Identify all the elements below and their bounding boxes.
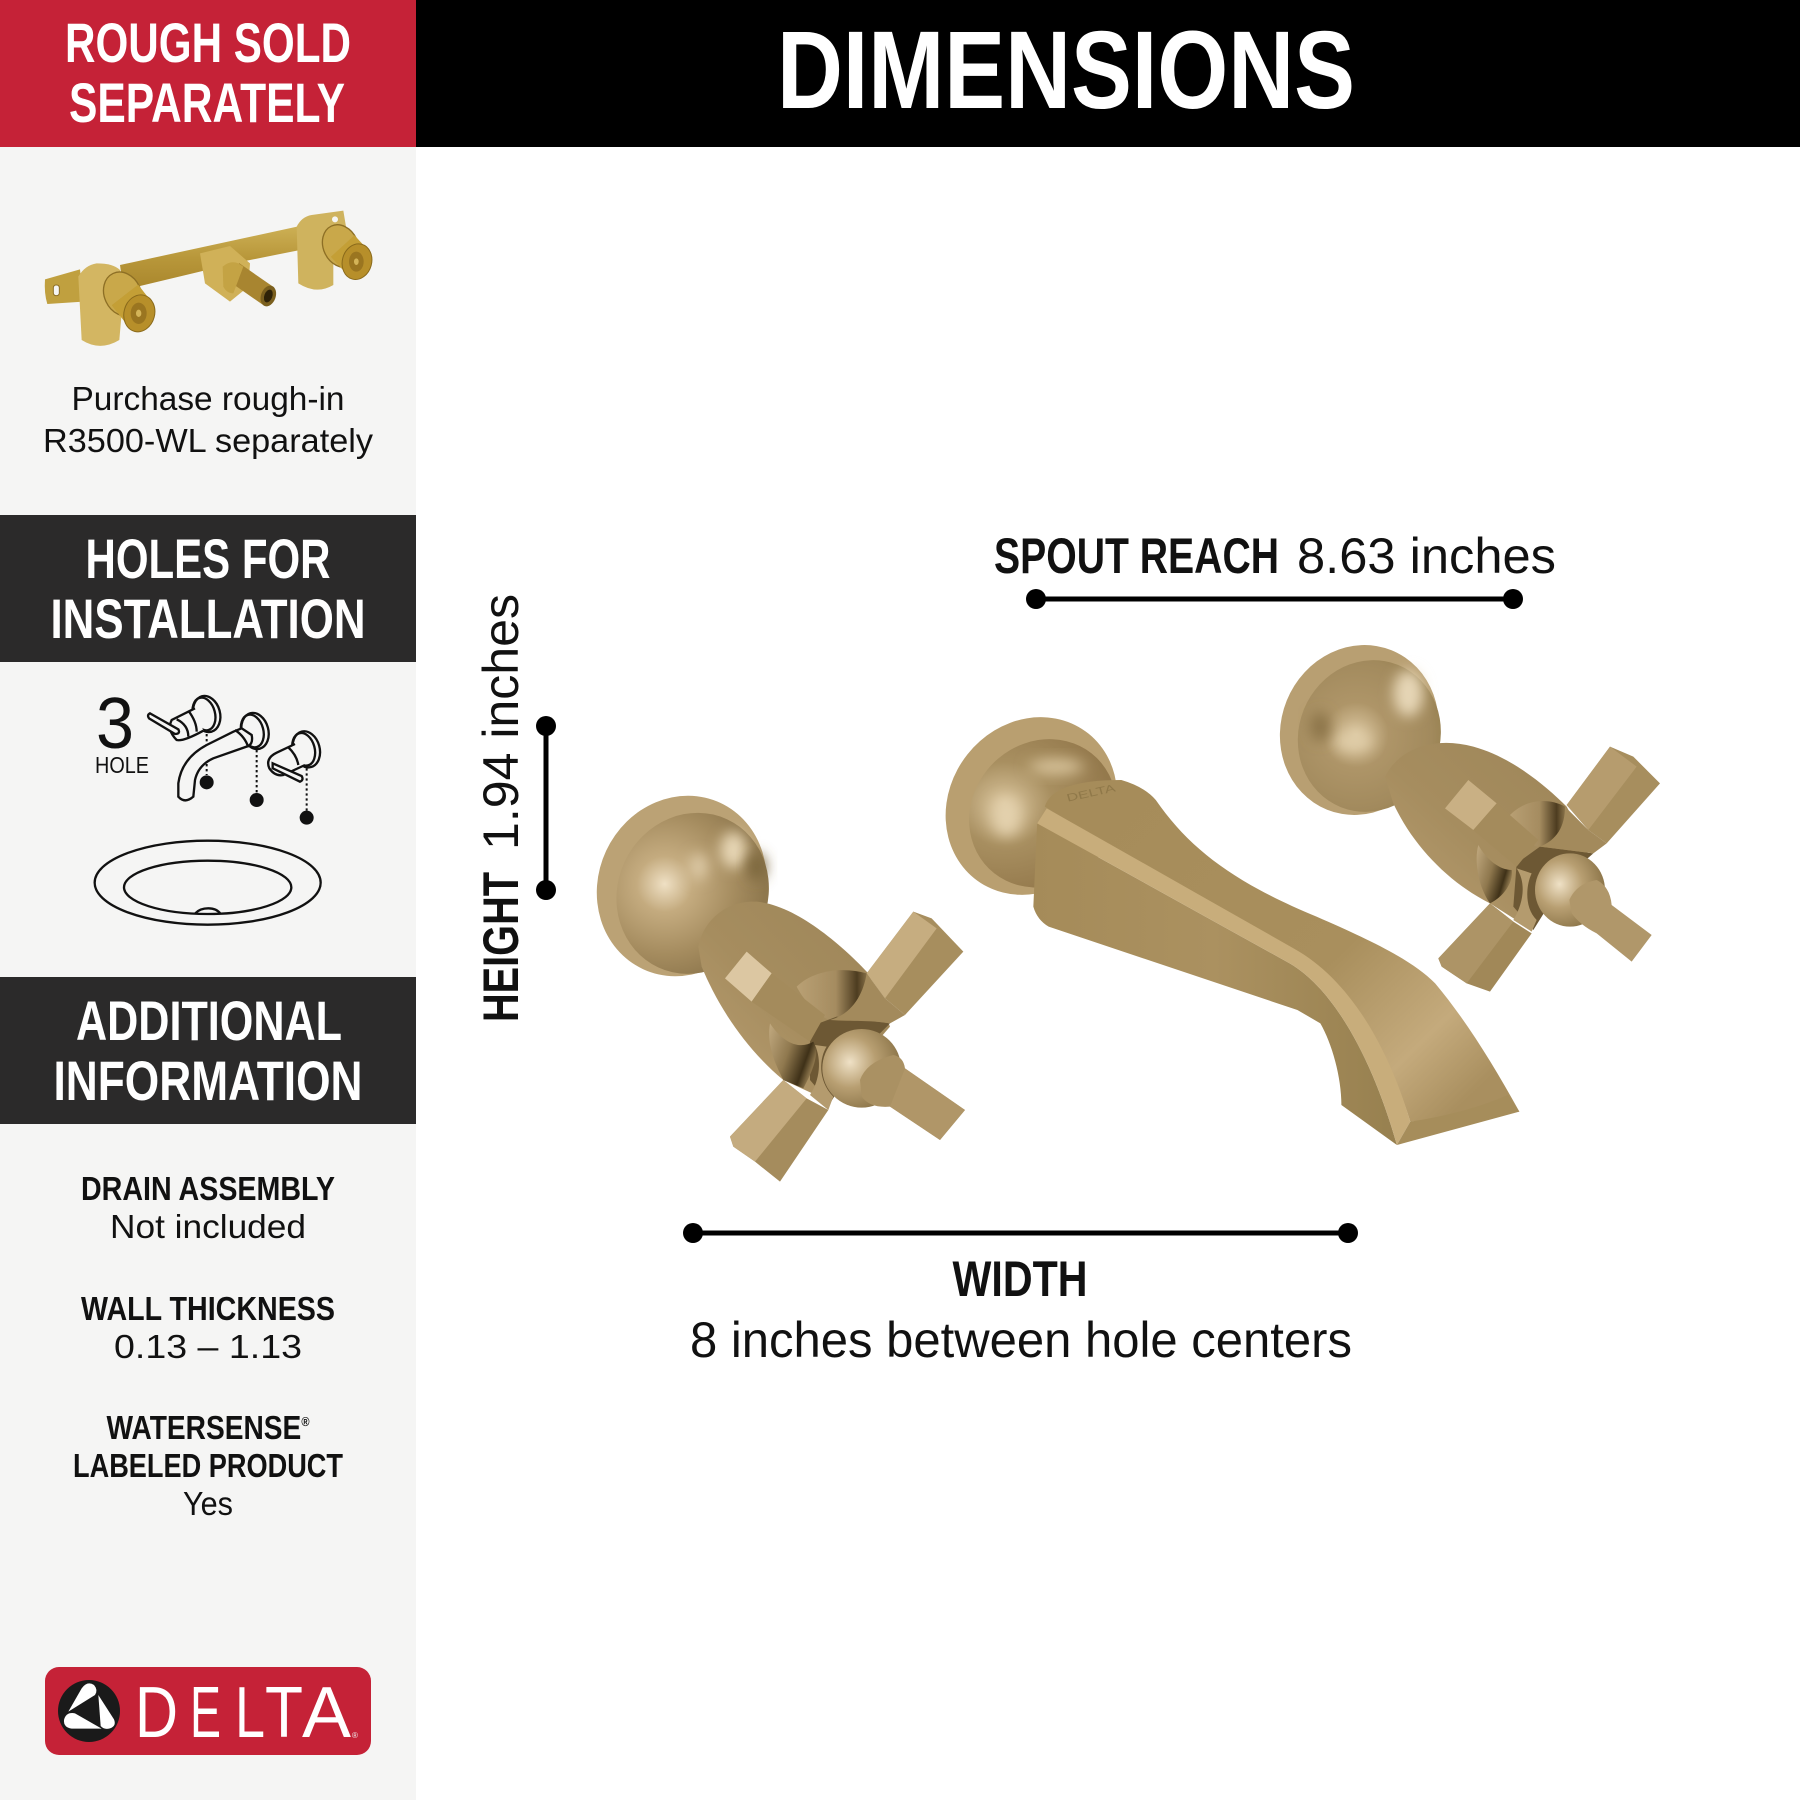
dimension: spout reach: SPOUT REACH (994, 528, 1279, 584)
header: holes for installation: HOLES FOR (86, 527, 330, 590)
image: center wall spout (922, 699, 1519, 1145)
header: additional information: ADDITIONAL (76, 989, 342, 1052)
image: left cross handle (567, 768, 965, 1182)
panel: left sidebar (0, 0, 416, 1800)
header: rough sold separately: SEPARATELY (69, 71, 345, 134)
text: purchase rough-in note (43, 380, 374, 459)
text: drain assembly (81, 1170, 335, 1245)
dimension: height: 1.94 inches (473, 594, 529, 850)
text: drain assembly: DRAIN ASSEMBLY (81, 1170, 335, 1207)
image: brass rough-in valve (45, 211, 376, 346)
header: holes for installation (0, 515, 416, 662)
header: additional information (0, 977, 416, 1124)
dimension: width: WIDTH (952, 1251, 1088, 1307)
logo: delta: L (235, 1673, 265, 1753)
text: wall thickness: WALL THICKNESS (81, 1290, 335, 1327)
dimension: width (683, 1223, 1358, 1368)
icon: three hole faucet and basin: 3 (96, 684, 134, 764)
text: purchase rough-in note: R3500-WL separately (43, 422, 374, 459)
title: dimensions banner: DIMENSIONS (777, 9, 1355, 132)
logo: delta: A (302, 1673, 351, 1753)
text: purchase rough-in note: Purchase rough-in (72, 380, 344, 417)
text: wall thickness (81, 1290, 335, 1365)
dimension: height (473, 594, 556, 1022)
header: rough sold separately: ROUGH SOLD (65, 11, 351, 74)
text: watersense labeled product: ® (301, 1414, 310, 1429)
text: watersense labeled product: WATERSENSE (106, 1409, 335, 1446)
icon: three hole faucet and basin: HOLE (95, 752, 149, 778)
logo: delta: ® (352, 1731, 358, 1740)
header: additional information: INFORMATION (54, 1049, 362, 1112)
icon: three hole faucet and basin (95, 684, 324, 925)
text: watersense labeled product (73, 1409, 343, 1522)
dimension: spout reach (994, 528, 1556, 609)
logo: delta: D (135, 1673, 178, 1753)
text: drain assembly: Not included (110, 1208, 306, 1245)
header: rough sold separately (0, 0, 416, 147)
logo: delta: T (265, 1673, 303, 1753)
title: dimensions banner (416, 0, 1800, 147)
dimension: spout reach: 8.63 inches (1297, 528, 1556, 584)
text: wall thickness: 0.13 – 1.13 (114, 1328, 302, 1365)
dimension: height: HEIGHT (473, 872, 529, 1022)
logo: delta: E (190, 1673, 221, 1753)
text: watersense labeled product: LABELED PRODUCT (73, 1447, 343, 1484)
image: center wall spout: DELTA (1065, 783, 1117, 804)
dimension: width: 8 inches between hole centers (690, 1312, 1352, 1368)
image: right cross handle (1254, 621, 1660, 992)
logo: delta (45, 1667, 371, 1755)
header: holes for installation: INSTALLATION (50, 587, 366, 650)
text: watersense labeled product: Yes (183, 1485, 233, 1522)
